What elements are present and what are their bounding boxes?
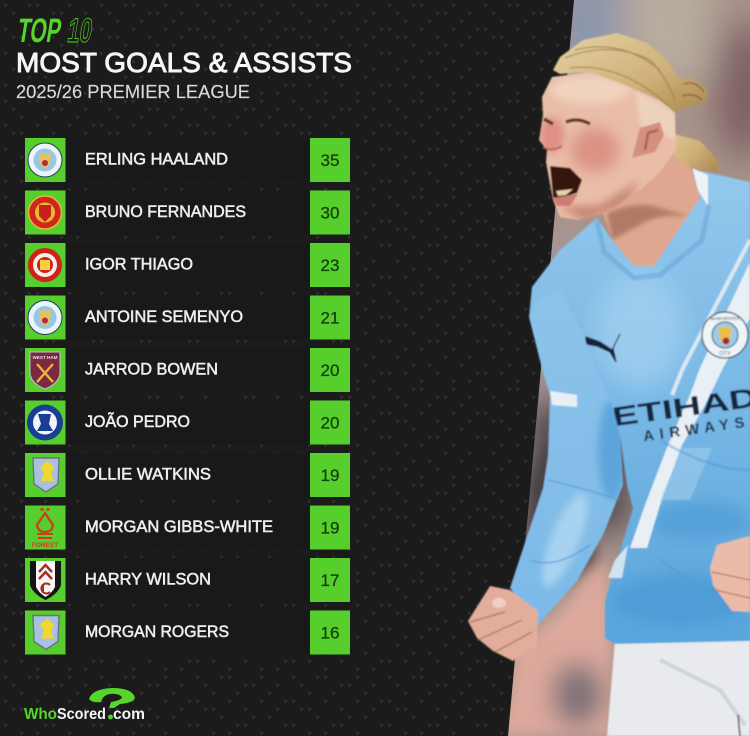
icon: Nottingham Forest crest	[32, 508, 58, 549]
icon: Manchester United crest	[28, 196, 62, 229]
row 3: Igor Thiago: 23	[321, 256, 339, 275]
puma logo	[586, 334, 620, 362]
row 10: Morgan Rogers: 16	[321, 624, 339, 642]
row 4: Antoine Semenyo	[25, 296, 350, 340]
main heading: MOST GOALS & ASSISTS	[16, 47, 352, 78]
row 1: Erling Haaland: ERLING HAALAND	[85, 150, 228, 168]
icon: West Ham crest	[30, 352, 60, 389]
club crest on shirt: CITY	[719, 351, 731, 357]
wordmark: Scored	[57, 706, 106, 723]
dark left panel with dotted texture	[0, 0, 574, 736]
row 6: João Pedro: JOÃO PEDRO	[85, 411, 190, 431]
club crest on shirt	[702, 312, 748, 358]
row 6: João Pedro	[25, 400, 350, 444]
row 6: João Pedro: 20	[321, 414, 339, 432]
row 5: Jarrod Bowen: JARROD BOWEN	[85, 360, 218, 378]
subheading: 2025/26 PREMIER LEAGUE	[16, 81, 250, 102]
icon: West Ham crest: WEST HAM	[32, 355, 58, 360]
jersey folds	[660, 440, 750, 600]
row 10: Morgan Rogers	[25, 610, 350, 654]
icon: Manchester City crest	[28, 300, 62, 334]
right fist	[710, 536, 750, 612]
brow and eye	[544, 119, 590, 124]
row 2: Bruno Fernandes	[25, 190, 350, 234]
row 4: Antoine Semenyo: ANTOINE SEMENYO	[85, 308, 243, 326]
row 4: Antoine Semenyo: 21	[321, 308, 339, 328]
hair ponytail	[666, 112, 718, 172]
player figure: Erling Haaland celebrating	[468, 33, 750, 736]
WhoScored logo	[24, 688, 145, 723]
row 8: Morgan Gibbs-White: MORGAN GIBBS-WHITE	[85, 518, 273, 536]
ranking table	[25, 138, 350, 654]
row 2: Bruno Fernandes: 30	[321, 204, 339, 222]
row 9: Harry Wilson: 17	[321, 571, 339, 590]
row 10: Morgan Rogers: MORGAN ROGERS	[85, 623, 229, 641]
icon: Manchester City crest	[28, 143, 62, 177]
white jersey stripes	[630, 262, 750, 548]
row 7: Ollie Watkins: 19	[321, 466, 339, 485]
row 5: Jarrod Bowen: 20	[321, 361, 339, 380]
icon: Chelsea crest	[27, 404, 63, 440]
sponsor	[610, 382, 750, 449]
open mouth	[550, 166, 582, 199]
face	[539, 72, 676, 222]
neck ribbing	[597, 205, 709, 278]
row 1: Erling Haaland: 35	[321, 151, 339, 170]
icon: Aston Villa crest	[33, 458, 59, 492]
row 7: Ollie Watkins	[25, 453, 350, 497]
sponsor: AIRWAYS	[642, 414, 746, 445]
icon: Aston Villa crest	[33, 616, 59, 650]
row 2: Bruno Fernandes: BRUNO FERNANDES	[85, 203, 246, 221]
shorts	[607, 636, 750, 736]
icon: Brentford crest	[28, 248, 62, 282]
wordmark: com	[113, 706, 145, 723]
slicked back hair with bun	[553, 33, 708, 113]
jersey body	[529, 168, 750, 644]
row 5: Jarrod Bowen	[25, 348, 350, 392]
nose shadow	[543, 146, 562, 149]
sponsor: ETIHAD	[610, 382, 750, 432]
neck	[600, 130, 700, 266]
left sleeve	[510, 290, 626, 625]
white collar stripe	[692, 168, 708, 206]
top 10 label: 10	[65, 12, 95, 50]
neck shadow	[607, 205, 692, 240]
icon: green question mark	[89, 688, 135, 719]
row 9: Harry Wilson	[25, 558, 350, 602]
background grey blur	[554, 665, 602, 725]
icon: Nottingham Forest crest: FOREST	[32, 542, 58, 549]
top 10 label: TOP	[15, 12, 64, 50]
photo background: blurred stadium crowd	[500, 0, 750, 736]
title block	[15, 12, 352, 102]
row 1: Erling Haaland	[25, 138, 350, 182]
ear	[632, 122, 664, 158]
wordmark: Who	[24, 706, 57, 723]
row 9: Harry Wilson: HARRY WILSON	[85, 570, 211, 588]
row 7: Ollie Watkins: OLLIE WATKINS	[85, 466, 211, 484]
row 8: Morgan Gibbs-White: 19	[321, 518, 339, 538]
row 8: Morgan Gibbs-White	[25, 506, 350, 550]
jersey shading	[595, 270, 750, 625]
club crest on shirt: MANCHESTER	[710, 316, 740, 321]
left fist	[468, 586, 538, 661]
row 3: Igor Thiago	[25, 243, 350, 287]
row 3: Igor Thiago: IGOR THIAGO	[85, 256, 193, 274]
icon: Fulham crest	[30, 561, 61, 600]
